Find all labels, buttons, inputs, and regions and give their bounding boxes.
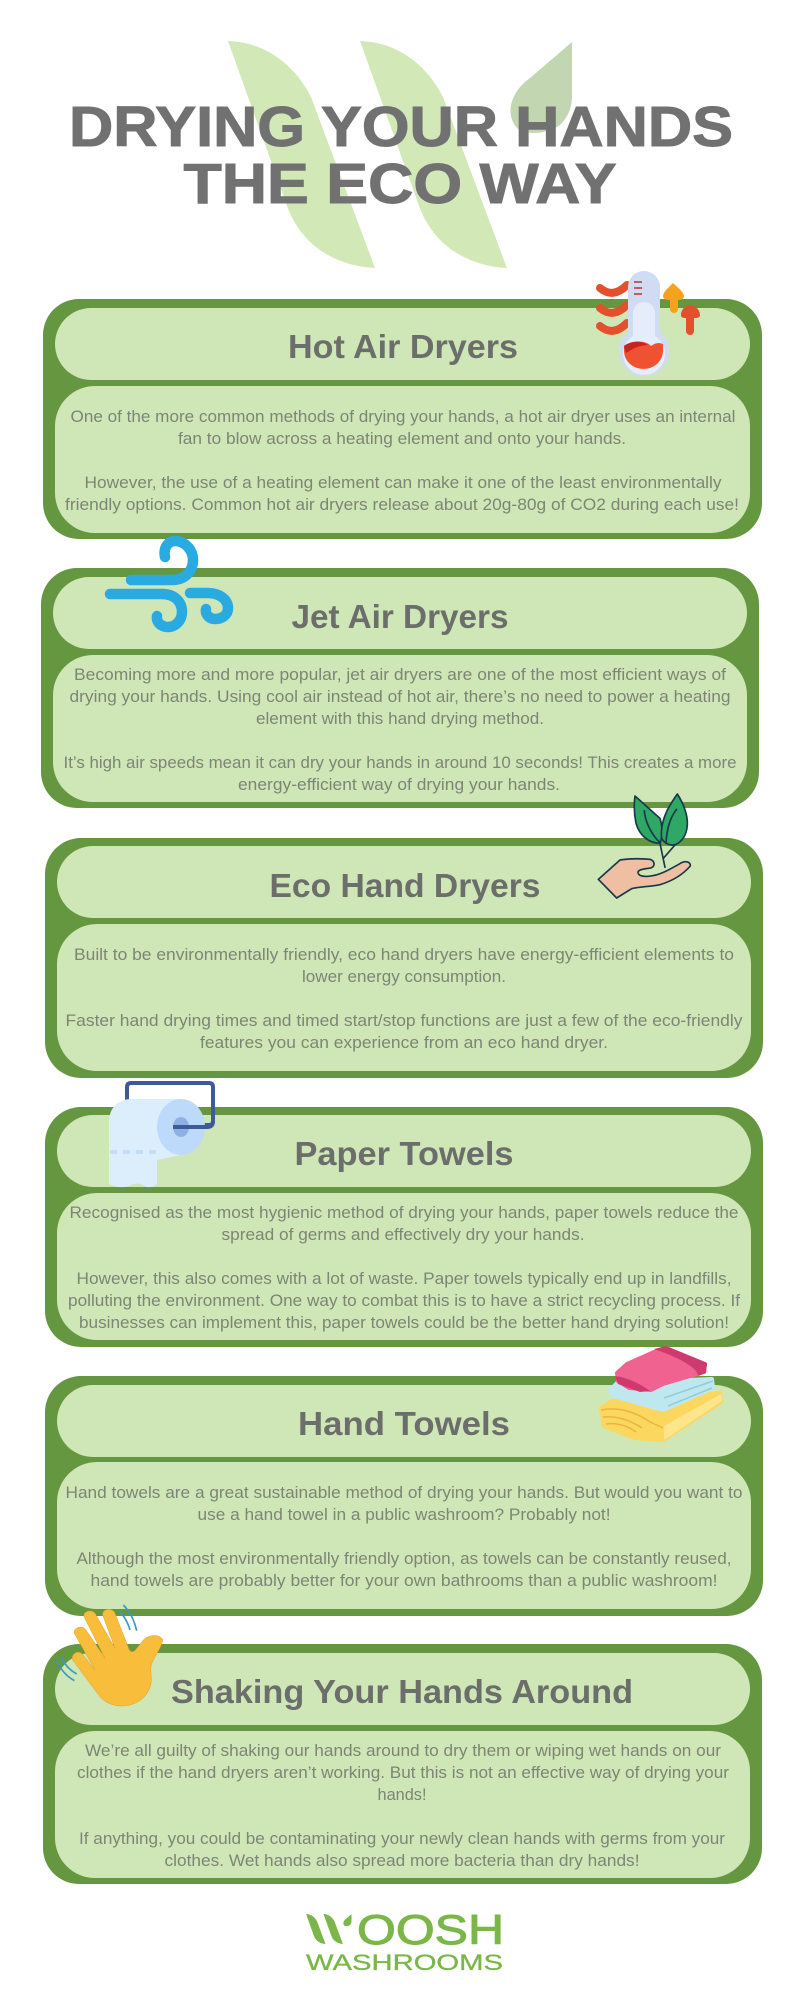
title (69, 95, 733, 216)
icon: paper towel roll (109, 1083, 213, 1187)
text: paper towels: spread of germs and effectively dry your hands. (222, 1226, 584, 1244)
heading: paper towels: Paper Towels (294, 1135, 514, 1172)
logo: Woosh Washrooms: WASHROOMS (306, 1950, 503, 1975)
text: shaking your hands around: clothes. Wet hands also spread more bacteria than dry hands! (164, 1852, 640, 1870)
text: hot air dryers (65, 408, 739, 514)
panel: eco hand dryers (45, 838, 763, 1078)
text: eco hand dryers: lower energy consumption. (302, 968, 506, 986)
icon: waving hand (57, 1605, 163, 1706)
logo: Woosh Washrooms (306, 1906, 504, 1975)
heading: hot air dryers: Hot Air Dryers (288, 328, 518, 365)
text: eco hand dryers: Faster hand drying times and timed start/stop functions are just a few of the eco-friendly (66, 1012, 743, 1030)
text: jet air dryers: It’s high air speeds mean it can dry your hands in around 10 seconds! This creates a more (64, 754, 736, 772)
text: paper towels: Recognised as the most hygienic method of drying your hands, paper towels reduce the (70, 1204, 738, 1222)
text: paper towels: polluting the environment. One way to combat this is to have a strict recycling process. If (68, 1292, 740, 1310)
icon: plant in hand (598, 794, 690, 898)
text: shaking your hands around: We’re all guilty of shaking our hands around to dry them or wiping wet hands on our (85, 1742, 722, 1760)
panel: hand towels (45, 1376, 763, 1616)
text: shaking your hands around (77, 1742, 730, 1870)
icon: wind (110, 541, 228, 627)
text: eco hand dryers (66, 946, 743, 1052)
text: hand towels: hand towels are probably better for your own bathrooms than a public washroom! (90, 1572, 718, 1590)
text: jet air dryers: energy-efficient way of drying your hands. (238, 776, 560, 794)
icon: thermometer (600, 271, 700, 376)
text: eco hand dryers: features you can experience from an eco hand dryer. (200, 1034, 608, 1052)
text: hot air dryers: However, the use of a heating element can make it one of the least environmentally (84, 474, 722, 492)
logo: Woosh Washrooms: OOSH (357, 1906, 504, 1953)
heading: jet air dryers: Jet Air Dryers (292, 598, 508, 635)
text: eco hand dryers: Built to be environmentally friendly, eco hand dryers have energy-efficient elements to (74, 946, 734, 964)
panel: jet air dryers (41, 568, 759, 808)
text: paper towels: businesses can implement this, paper towels could be the better hand drying solution! (79, 1314, 729, 1332)
panel: hot air dryers (43, 299, 762, 539)
text: shaking your hands around: clothes if the hand dryers aren’t working. But this is not an effective way of drying your (77, 1764, 730, 1782)
text: shaking your hands around: hands! (378, 1786, 426, 1804)
text: hot air dryers: fan to blow across a heating element and onto your hands. (178, 430, 626, 448)
heading: hand towels: Hand Towels (298, 1405, 510, 1442)
panel: shaking your hands around (43, 1644, 762, 1884)
icon: stacked towels (601, 1346, 722, 1440)
heading: eco hand dryers: Eco Hand Dryers (270, 867, 540, 904)
text: paper towels: However, this also comes with a lot of waste. Paper towels typically end up in landfills, (76, 1270, 731, 1288)
text: hand towels: Hand towels are a great sustainable method of drying your hands. But would you want to (66, 1484, 742, 1502)
heading: shaking your hands around: Shaking Your Hands Around (171, 1673, 633, 1710)
text: jet air dryers: drying your hands. Using cool air instead of hot air, there’s no need to power a heating (70, 688, 730, 706)
title: THE ECO WAY (184, 152, 616, 216)
text: hot air dryers: One of the more common methods of drying your hands, a hot air dryer uses an internal (70, 408, 735, 426)
text: hand towels (66, 1484, 742, 1590)
text: hand towels: Although the most environmentally friendly option, as towels can be constantly reused, (76, 1550, 732, 1568)
title: DRYING YOUR HANDS (69, 95, 733, 159)
text: shaking your hands around: If anything, you could be contaminating your newly clean hands with germs from your (79, 1830, 726, 1848)
text: jet air dryers (64, 666, 736, 794)
text: jet air dryers: element with this hand drying method. (256, 710, 544, 728)
watermark logo (228, 41, 572, 268)
panel: paper towels (45, 1107, 763, 1347)
text: paper towels (68, 1204, 740, 1332)
text: jet air dryers: Becoming more and more popular, jet air dryers are one of the most efficient ways of (74, 666, 726, 684)
text: hand towels: use a hand towel in a public washroom? Probably not! (198, 1506, 610, 1524)
text: hot air dryers: friendly options. Common hot air dryers release about 20g-80g of CO2 during each use! (65, 496, 739, 514)
